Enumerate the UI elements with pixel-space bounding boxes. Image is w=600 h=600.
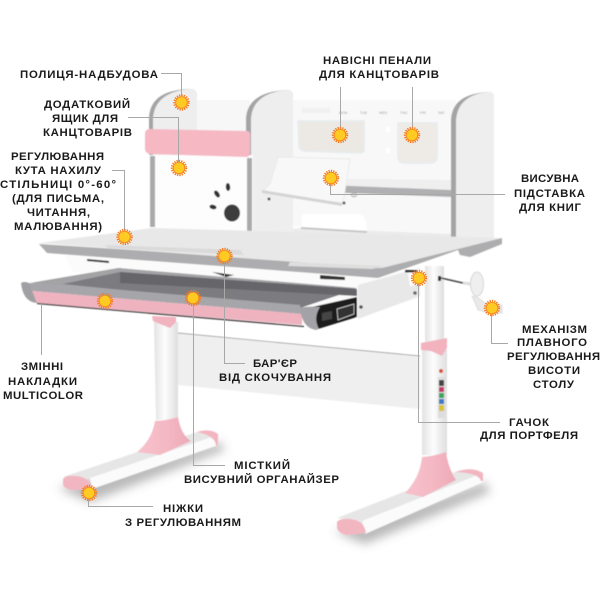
right foot cap front bbox=[337, 519, 366, 535]
label: feet: З РЕГУЛЮВАННЯМ bbox=[125, 517, 241, 529]
label: height mechanism: ПЛАВНОГО bbox=[517, 337, 587, 349]
marker: pencil case left bbox=[333, 128, 347, 142]
tabletop edge bbox=[39, 238, 502, 278]
label: replaceable strips: НАКЛАДКИ bbox=[8, 376, 77, 388]
label: organiser: ВИСУВНИЙ ОРГАНАЙЗЕР bbox=[184, 473, 339, 486]
right foot top bbox=[337, 472, 483, 521]
marker: tilt bbox=[117, 230, 132, 244]
tabletop brackets bbox=[87, 259, 345, 280]
weekday strip on back panel: THU bbox=[400, 111, 408, 115]
left foot side bbox=[90, 435, 218, 489]
organiser runner bbox=[312, 297, 357, 329]
weekday strip on back panel: SAT bbox=[438, 111, 446, 115]
weekday strip on back panel: TUE bbox=[360, 111, 368, 115]
shelf bar bbox=[252, 182, 451, 197]
label: extra drawer bbox=[43, 98, 132, 139]
label: hook: ДЛЯ ПОРТФЕЛЯ bbox=[480, 430, 578, 442]
label: tilt adjustment: (ДЛЯ ПИСЬМА, bbox=[12, 193, 104, 205]
label: extra drawer: КАНЦТОВАРІВ bbox=[43, 127, 132, 139]
label: book stand: ДЛЯ КНИГ bbox=[519, 202, 582, 214]
callout lines bbox=[42, 74, 508, 506]
label: book stand bbox=[514, 173, 585, 214]
left upright bbox=[149, 89, 197, 232]
label: height mechanism bbox=[507, 324, 600, 391]
left foot cap back bbox=[197, 430, 218, 446]
marker: organiser bbox=[186, 291, 200, 305]
label: tilt adjustment: РЕГУЛЮВАННЯ bbox=[11, 151, 104, 163]
shelf back panel bbox=[196, 100, 456, 246]
marker: pencil case right bbox=[405, 128, 419, 142]
right end cap bbox=[300, 307, 320, 330]
label: pencil cases bbox=[319, 55, 439, 81]
label: height mechanism: РЕГУЛЮВАННЯ bbox=[507, 351, 600, 363]
marker: hook bbox=[412, 271, 426, 285]
right leg base bbox=[405, 452, 456, 497]
weekday strip on back panel: FRI bbox=[420, 111, 426, 115]
organiser front bar bbox=[28, 283, 302, 314]
right leg collar bbox=[421, 338, 447, 356]
label: shelf: ПОЛИЦЯ-НАДБУДОВА bbox=[20, 69, 158, 81]
hanging pencil case left bbox=[298, 121, 364, 153]
floor shadows bbox=[58, 442, 490, 544]
label: tilt adjustment: ЧИТАННЯ, bbox=[27, 207, 90, 219]
label: tilt adjustment: КУТА НАХИЛУ bbox=[15, 165, 102, 177]
weekday strip on back panel bbox=[302, 108, 446, 153]
pink drawer front bbox=[145, 129, 250, 157]
marker: crank bbox=[485, 301, 499, 315]
right foot side bbox=[362, 473, 483, 534]
left leg bracket bbox=[152, 316, 176, 328]
lower shelf slot bbox=[301, 214, 367, 231]
right leg lower post bbox=[422, 350, 447, 455]
desk frame under tabletop bbox=[63, 252, 420, 318]
marker: book stand bbox=[324, 171, 338, 185]
label: hook bbox=[480, 417, 578, 442]
crank handle bbox=[438, 272, 502, 313]
drawer box bbox=[149, 155, 253, 234]
marker: extra drawer bbox=[172, 161, 186, 175]
marker: feet bbox=[82, 486, 96, 500]
label: feet: НІЖКИ bbox=[163, 503, 203, 515]
label: replaceable strips bbox=[3, 361, 83, 402]
label: replaceable strips: MULTICOLOR bbox=[3, 390, 83, 402]
label: barrier bbox=[219, 358, 331, 384]
pencil groove bbox=[105, 245, 244, 255]
label: height mechanism: СТОЛУ bbox=[533, 379, 575, 391]
label: extra drawer: ДОДАТКОВИЙ bbox=[44, 98, 130, 111]
label: organiser: МІСТКИЙ bbox=[234, 459, 290, 472]
label: book stand: ВИСУВНА bbox=[521, 173, 579, 185]
crossbar panel bbox=[178, 333, 420, 409]
marker: barrier bbox=[217, 249, 232, 263]
label: pencil cases: ДЛЯ КАНЦТОВАРІВ bbox=[319, 69, 439, 81]
left foot top bbox=[63, 432, 218, 478]
label: replaceable strips: ЗМІННІ bbox=[21, 361, 63, 373]
label: organiser bbox=[184, 459, 339, 486]
weekday strip on back panel: MON bbox=[339, 111, 348, 115]
label: tilt adjustment: СТІЛЬНИЦІ 0°-60° bbox=[0, 179, 116, 191]
label: pencil cases: НАВІСНІ ПЕНАЛИ bbox=[323, 55, 431, 67]
tabletop surface bbox=[39, 228, 502, 268]
marker: shelf bbox=[174, 95, 189, 110]
label: extra drawer: ЯЩИК ДЛЯ bbox=[52, 113, 118, 125]
frame side panel bbox=[358, 268, 422, 319]
right leg upper post bbox=[425, 266, 444, 342]
label: tilt adjustment: МАЛЮВАННЯ) bbox=[14, 221, 102, 233]
left foot cap front bbox=[63, 476, 92, 490]
left leg post bbox=[154, 322, 178, 420]
label: book stand: ПІДСТАВКА bbox=[514, 188, 585, 200]
marker: replaceable strip bbox=[98, 294, 112, 308]
height scale sticker bbox=[438, 369, 445, 418]
label: barrier: БАР'ЄР bbox=[253, 358, 297, 370]
hanging pencil case right bbox=[398, 123, 437, 163]
pink replaceable strip bbox=[32, 291, 302, 325]
sliding book stand bbox=[262, 157, 357, 206]
organiser interior bbox=[30, 268, 357, 308]
weekday strip on back panel: WED bbox=[379, 111, 388, 115]
label: barrier: ВІД СКОЧУВАННЯ bbox=[219, 372, 331, 384]
shelf plate bbox=[252, 178, 451, 191]
desk illustration bbox=[21, 89, 502, 544]
right upright bbox=[451, 92, 494, 246]
label: height mechanism: ВИСОТИ bbox=[528, 365, 580, 377]
right foot cap back bbox=[455, 469, 483, 481]
label: feet bbox=[125, 503, 241, 529]
label: tilt adjustment bbox=[0, 151, 116, 233]
left leg base bbox=[137, 417, 191, 455]
middle upright bbox=[246, 90, 293, 236]
label: hook: ГАЧОК bbox=[509, 417, 549, 429]
label: height mechanism: МЕХАНІЗМ bbox=[522, 324, 587, 336]
left end cap bbox=[21, 282, 37, 303]
